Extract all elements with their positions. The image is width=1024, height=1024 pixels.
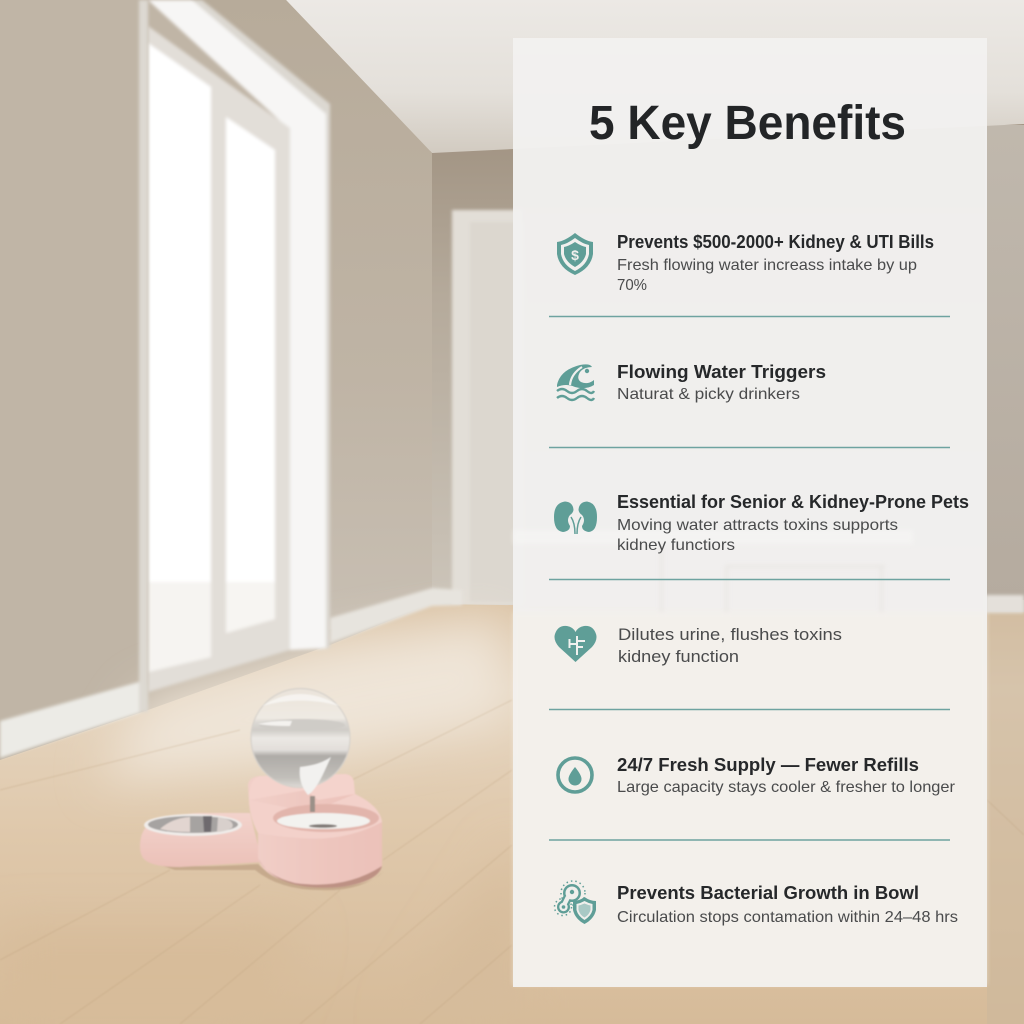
heading: Essential for Senior & Kidney-Prone Pets — [617, 491, 969, 512]
description: 70% — [617, 277, 647, 294]
icon: shield with dollar — [557, 233, 593, 275]
description: kidney functiors — [617, 537, 735, 554]
description: kidney function — [618, 647, 739, 666]
divider — [549, 578, 950, 580]
icon: kidneys — [554, 502, 597, 534]
benefit 3 — [554, 491, 969, 554]
icon: shield with dollar: $ — [571, 247, 579, 263]
heading: Prevents $500-2000+ Kidney & UTI Bills — [617, 231, 934, 252]
divider — [549, 316, 950, 318]
description — [617, 257, 917, 294]
door — [452, 210, 524, 606]
heading: Flowing Water Triggers — [617, 361, 826, 382]
icon: wave — [557, 364, 594, 400]
benefit 2 — [557, 361, 826, 403]
window frame — [148, 0, 330, 692]
divider — [549, 708, 950, 710]
divider — [549, 446, 950, 448]
icon: heart — [554, 626, 596, 662]
floor — [0, 604, 1024, 1024]
description: Large capacity stays cooler & fresher to longer — [617, 779, 956, 796]
icon: water drop in circle — [558, 758, 592, 792]
water spout — [310, 796, 315, 812]
heading: Prevents Bacterial Growth in Bowl — [617, 882, 919, 903]
title: 5 Key Benefits — [589, 97, 906, 150]
water tray — [273, 804, 379, 832]
description: Dilutes urine, flushes toxins — [618, 625, 842, 644]
floor shadow — [145, 860, 383, 890]
heading: 24/7 Fresh Supply — Fewer Refills — [617, 754, 919, 775]
description: Naturat & picky drinkers — [617, 386, 800, 403]
pet water fountain — [140, 688, 383, 890]
benefit 5 — [558, 754, 956, 796]
panel: benefits — [513, 38, 987, 987]
icon: bacteria and shield — [554, 881, 596, 924]
benefit 4 — [554, 625, 842, 666]
description — [618, 625, 842, 666]
glass sphere — [250, 688, 350, 795]
description — [617, 517, 898, 554]
baseboards — [0, 0, 1024, 758]
description: Circulation stops contamation within 24–48 hrs — [617, 909, 958, 926]
benefit 1 — [557, 231, 934, 294]
divider — [549, 839, 950, 841]
benefit 6 — [554, 881, 958, 926]
description: Moving water attracts toxins supports — [617, 517, 898, 534]
main body — [248, 774, 382, 886]
stainless bowl — [144, 814, 242, 836]
left bowl base — [140, 813, 262, 867]
description: Fresh flowing water increass intake by up — [617, 257, 917, 274]
